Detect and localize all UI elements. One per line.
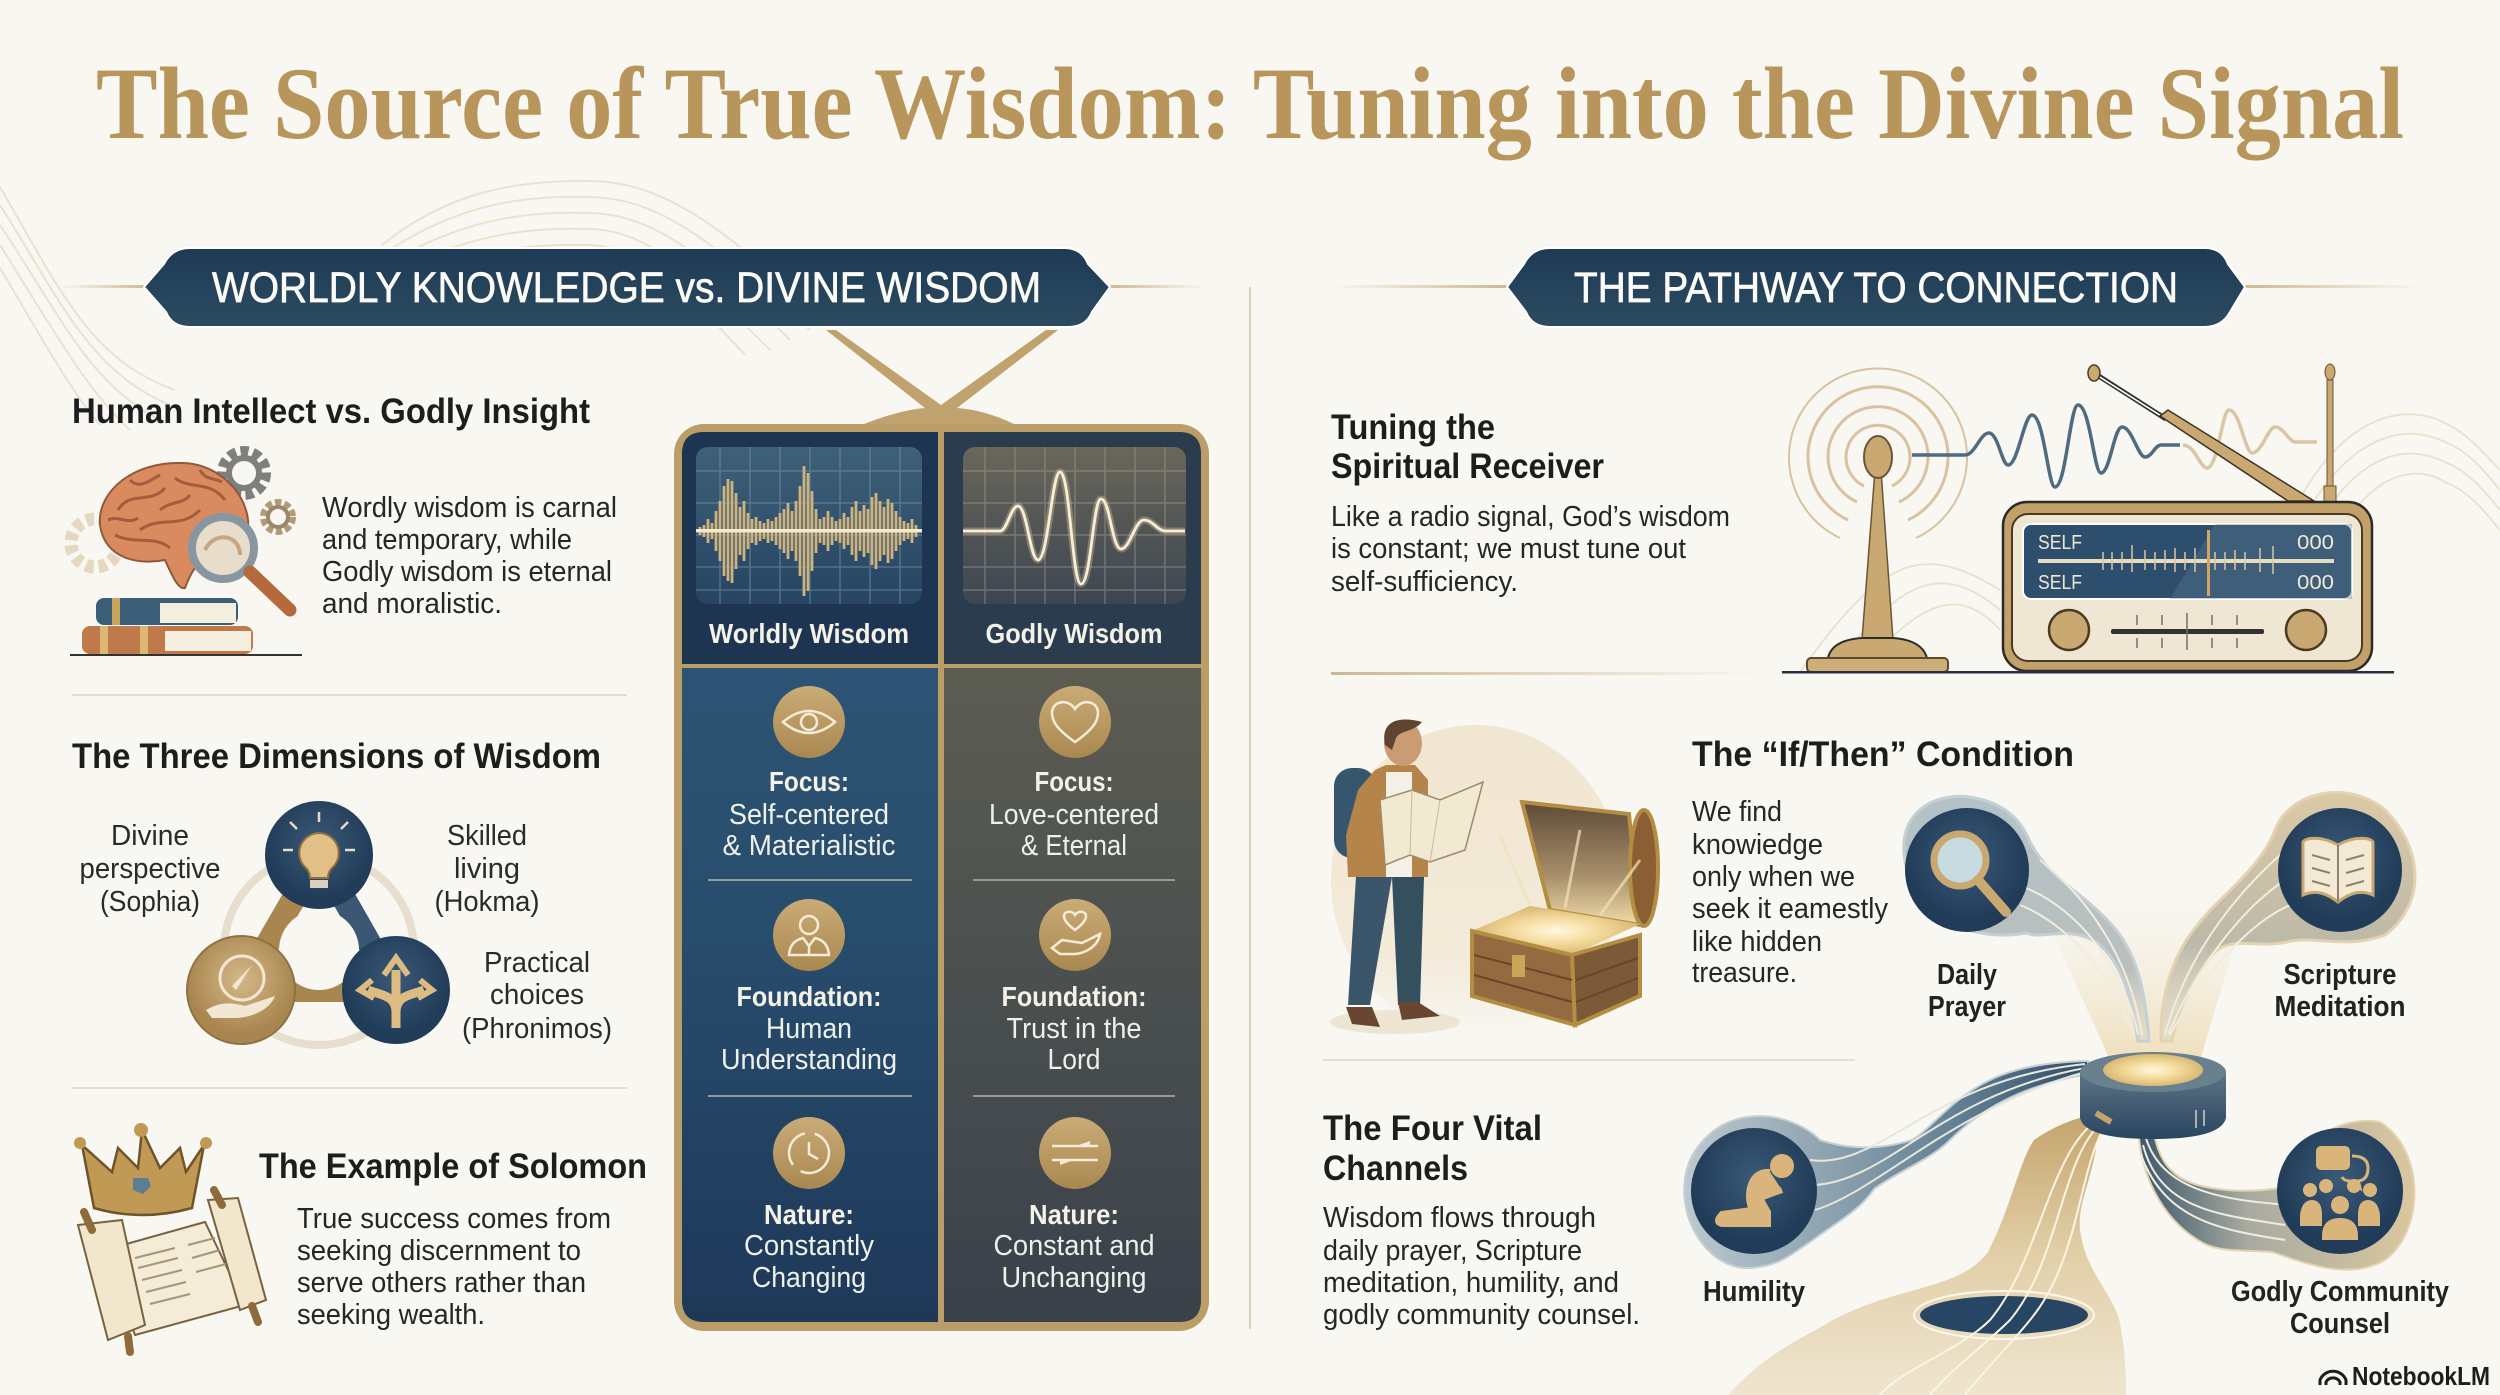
row: nature: Constant and xyxy=(994,1230,1154,1262)
body text: True success comes from xyxy=(297,1203,611,1235)
row: focus: Focus: xyxy=(769,766,849,797)
icon: broadcast tower with signal rings xyxy=(1789,369,1967,672)
label: hokma xyxy=(434,820,540,918)
channel: humility xyxy=(1691,1128,1817,1308)
icon: person xyxy=(773,899,845,971)
diagram: channels flowing from central hub xyxy=(1684,793,2449,1395)
row: nature: Nature: xyxy=(764,1199,854,1230)
row: foundation xyxy=(721,899,897,1076)
heading: The Three Dimensions of Wisdom xyxy=(72,737,601,776)
body text xyxy=(297,1203,611,1331)
label: sophia: Divine xyxy=(111,820,189,852)
body text: serve others rather than xyxy=(297,1267,586,1299)
icon: clock with arrows xyxy=(773,1117,845,1189)
body text: Wordly wisdom is carnal xyxy=(322,492,617,524)
body text xyxy=(1692,796,1888,989)
icon: open scroll xyxy=(78,1190,266,1352)
illustration: glowing treasure chest xyxy=(1472,802,1658,1025)
row: focus: Focus: xyxy=(1034,766,1114,797)
heading xyxy=(1331,408,1604,486)
icon: vintage radio: SELF xyxy=(2038,572,2082,594)
body text: We find xyxy=(1692,796,1782,828)
label: phronimos xyxy=(462,947,612,1045)
section banner: the pathway to connection: THE PATHWAY TO CONNECTION xyxy=(1574,264,2178,312)
channel: scripture meditation xyxy=(2274,808,2406,1023)
icon: signal wave xyxy=(1912,405,2317,487)
row: foundation: Human xyxy=(766,1013,852,1045)
body text xyxy=(1331,501,1730,598)
icon: compass in hand xyxy=(206,956,275,1018)
label: sophia: (Sophia) xyxy=(100,886,200,918)
row: focus: Self-centered xyxy=(729,799,889,831)
column: worldly wisdom xyxy=(696,447,922,1294)
panel: the three dimensions of wisdom xyxy=(72,737,612,1045)
icon: antenna arms xyxy=(826,330,1058,424)
heading: The Four Vital xyxy=(1323,1109,1542,1148)
column title: Godly Wisdom xyxy=(986,618,1162,649)
icon: branching arrows xyxy=(360,958,432,1028)
panel: tuning the spiritual receiver xyxy=(1331,364,2394,674)
heading: Channels xyxy=(1323,1149,1468,1188)
label: phronimos: (Phronimos) xyxy=(462,1013,612,1045)
chart: noisy worldly signal xyxy=(696,447,922,604)
label: phronimos: choices xyxy=(490,979,584,1011)
column: godly wisdom xyxy=(963,447,1186,1294)
column title: Worldly Wisdom xyxy=(709,618,909,649)
icon: steady lines xyxy=(1039,1117,1111,1189)
label: hokma: Skilled xyxy=(447,820,527,852)
body text xyxy=(322,492,617,620)
body text: treasure. xyxy=(1692,957,1797,989)
channel: scripture meditation: Meditation xyxy=(2274,991,2406,1023)
row: nature: Unchanging xyxy=(1002,1262,1146,1294)
row: focus: & Eternal xyxy=(1021,830,1127,862)
icon: light bulb xyxy=(283,812,355,888)
row: nature xyxy=(744,1117,874,1294)
row: foundation: Foundation: xyxy=(1002,981,1146,1012)
icon: vintage radio xyxy=(2003,364,2372,671)
panel: human intellect vs godly insight xyxy=(70,392,617,656)
channel: daily prayer xyxy=(1905,808,2029,1023)
body text: and temporary, while xyxy=(322,524,572,556)
body text: godly community counsel. xyxy=(1323,1299,1640,1331)
section banner: worldly knowledge vs divine wisdom xyxy=(144,248,1110,327)
section banner: worldly knowledge vs divine wisdom: WORLDLY KNOWLEDGE vs. DIVINE WISDOM xyxy=(212,264,1041,312)
body text: Godly wisdom is eternal xyxy=(322,556,612,588)
illustration: explorer with map xyxy=(1330,720,1621,1035)
label: hokma: (Hokma) xyxy=(434,886,540,918)
body text: seeking discernment to xyxy=(297,1235,581,1267)
heading: The Example of Solomon xyxy=(259,1147,647,1186)
body text: seek it eamestly xyxy=(1692,893,1888,925)
comparison panel: worldly vs godly wisdom xyxy=(674,330,1209,1331)
panel: the example of solomon xyxy=(74,1123,647,1352)
channel: godly community counsel: Godly Community xyxy=(2231,1276,2449,1308)
body text: is constant; we must tune out xyxy=(1331,533,1686,565)
channel: daily prayer: Daily xyxy=(1937,959,1997,991)
heading: Spiritual Receiver xyxy=(1331,447,1604,486)
row: foundation: Foundation: xyxy=(736,981,882,1012)
body text: like hidden xyxy=(1692,926,1822,958)
row: nature: Constantly xyxy=(744,1230,874,1262)
row: foundation: Trust in the xyxy=(1006,1013,1142,1045)
body text: self-sufficiency. xyxy=(1331,566,1518,598)
flow: scripture meditation xyxy=(2161,793,2415,1041)
channel: humility: Humility xyxy=(1703,1276,1805,1308)
body text: knowiedge xyxy=(1692,829,1823,861)
label: sophia xyxy=(80,820,220,918)
flow: floor path xyxy=(1728,1113,2126,1395)
body text: Like a radio signal, God’s wisdom xyxy=(1331,501,1730,533)
icon: eye xyxy=(773,686,845,758)
row: foundation: Lord xyxy=(1048,1044,1100,1076)
row: nature: Nature: xyxy=(1029,1199,1119,1230)
row: nature xyxy=(994,1117,1154,1294)
heading: Tuning the xyxy=(1331,408,1495,447)
channel: scripture meditation: Scripture xyxy=(2284,959,2396,991)
heading: Human Intellect vs. Godly Insight xyxy=(72,392,590,431)
row: nature: Changing xyxy=(752,1262,866,1294)
channel: godly community counsel xyxy=(2231,1128,2449,1340)
icon: brain, gears, magnifier and books xyxy=(70,451,302,656)
channel: daily prayer: Prayer xyxy=(1928,991,2006,1023)
body text: only when we xyxy=(1692,861,1855,893)
label: phronimos: Practical xyxy=(484,947,590,979)
body text: daily prayer, Scripture xyxy=(1323,1235,1582,1267)
body text: Wisdom flows through xyxy=(1323,1202,1596,1234)
body text: and moralistic. xyxy=(322,588,502,620)
row: focus xyxy=(989,686,1159,862)
flow: godly community xyxy=(2138,1121,2414,1270)
row: focus: & Materialistic xyxy=(722,830,896,862)
icon: crown xyxy=(74,1123,212,1215)
body text: meditation, humility, and xyxy=(1323,1267,1619,1299)
label: hokma: living xyxy=(454,853,520,885)
row: foundation: Understanding xyxy=(721,1044,897,1076)
panel: the four vital channels xyxy=(1323,793,2449,1395)
diagram: three linked circles xyxy=(187,801,450,1045)
icon: vintage radio: 000 xyxy=(2297,532,2334,554)
panel: the if/then condition xyxy=(1330,720,2074,1035)
chart: clean godly signal xyxy=(963,447,1186,604)
heading xyxy=(1323,1109,1542,1188)
section banner: the pathway to connection xyxy=(1507,248,2245,327)
flow: humility xyxy=(1684,1061,2088,1268)
row: focus xyxy=(722,686,896,862)
body text: seeking wealth. xyxy=(297,1299,485,1331)
body text xyxy=(1323,1202,1640,1331)
icon: heart in hand xyxy=(1039,899,1111,971)
row: focus: Love-centered xyxy=(989,799,1159,831)
label: sophia: perspective xyxy=(80,853,220,885)
central hub xyxy=(2080,1052,2226,1139)
flow: daily prayer xyxy=(1904,796,2149,1041)
icon: vintage radio: 000 xyxy=(2297,572,2334,594)
row: foundation xyxy=(1002,899,1146,1076)
icon: heart xyxy=(1039,686,1111,758)
icon: vintage radio: SELF xyxy=(2038,532,2082,554)
channel: godly community counsel: Counsel xyxy=(2290,1308,2390,1340)
heading: The “If/Then” Condition xyxy=(1692,735,2074,774)
